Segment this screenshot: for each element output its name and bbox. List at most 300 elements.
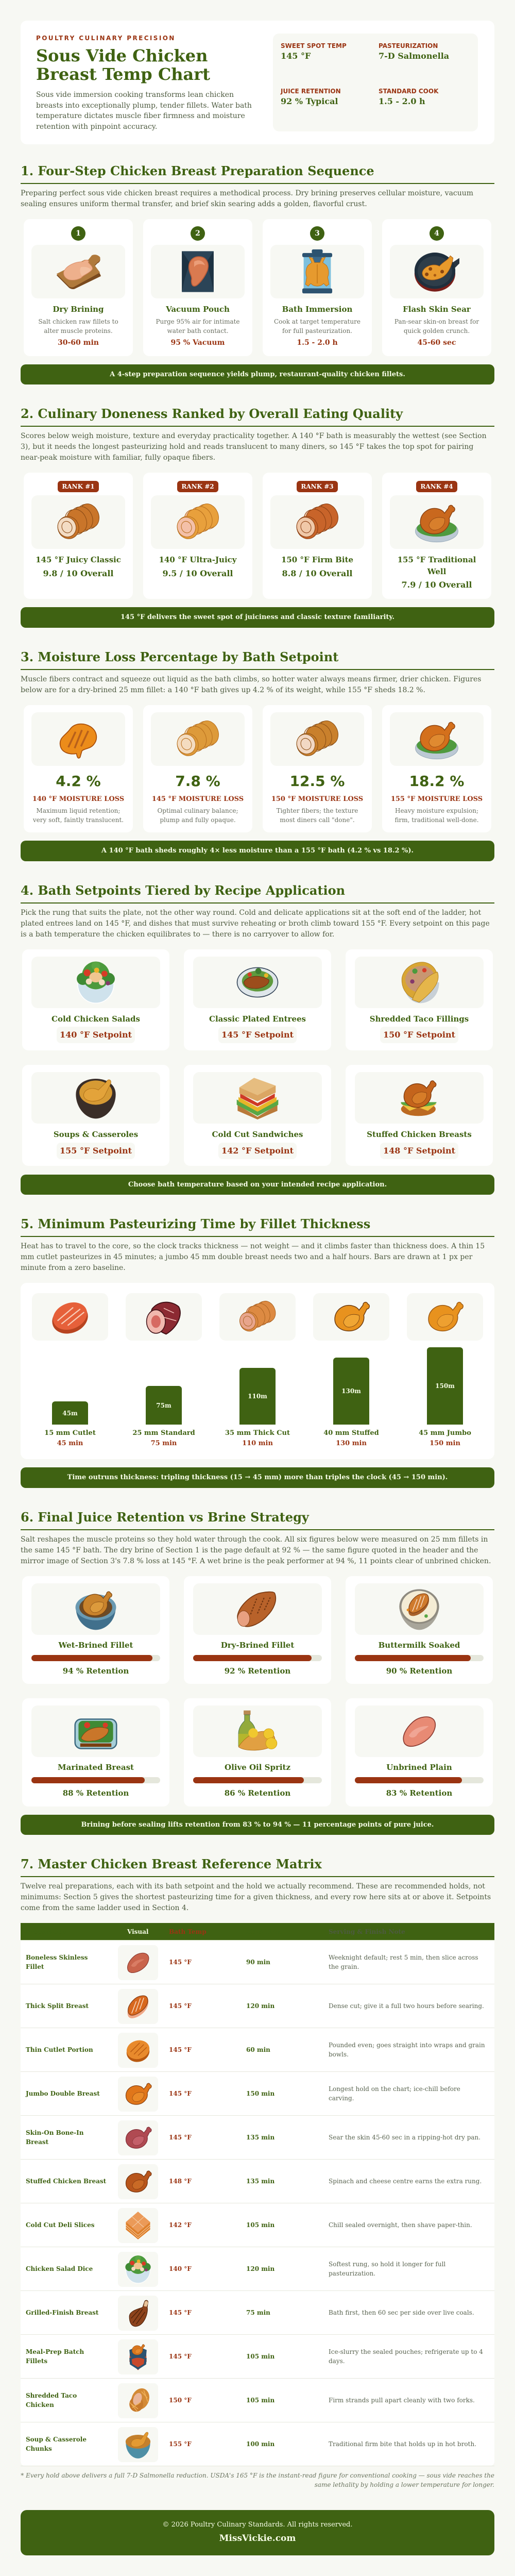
intro text: minimums: Section 5 gives the shortest pasteurizing time for a given thickness, and every row here sits at or above it. Setpoints bbox=[21, 1893, 491, 1901]
card: cold chicken salads bbox=[22, 949, 169, 1050]
row: jumbo double breast: 150 min bbox=[246, 2090, 274, 2097]
table header: Bath Temp bbox=[169, 1928, 207, 1935]
table footnote: * Every hold above delivers a full 7-D Salmonella reduction. USDA's 165 °F is the instant-read figure for conventional cooking — sous vide reaches the bbox=[21, 2472, 494, 2479]
intro text: Preparing perfect sous vide chicken breast requires a methodical process. Dry brining preserves cellular moisture, vacuum bbox=[21, 189, 473, 197]
icon: stacked slices bbox=[124, 2211, 152, 2240]
intro text: come from the same ladder used in Section 4. bbox=[21, 1904, 188, 1912]
key stats panel bbox=[273, 34, 478, 131]
setpoint bbox=[218, 1027, 297, 1043]
stat: sweet spot temp: 145 °F bbox=[281, 51, 311, 61]
score: 9.8 / 10 Overall bbox=[43, 568, 114, 578]
bar: 130 min bbox=[333, 1358, 369, 1425]
intro text: minute from a zero baseline. bbox=[21, 1264, 126, 1272]
card: vacuum pouch bbox=[143, 219, 252, 356]
intro text bbox=[21, 1534, 491, 1567]
column label: 40 mm bbox=[305, 1428, 398, 1449]
description: very soft, faintly translucent. bbox=[33, 816, 124, 824]
takeaway banner bbox=[21, 1175, 494, 1195]
stat: standard cook: STANDARD COOK bbox=[379, 88, 438, 95]
setpoint bbox=[380, 1143, 458, 1159]
icon: jumbo breast bbox=[425, 1297, 465, 1336]
icon: sliced breast bbox=[177, 721, 219, 756]
description bbox=[276, 807, 358, 824]
row: thick split breast: Dense cut; give it a full two hours before searing. bbox=[329, 2002, 484, 2010]
step description: water bath contact. bbox=[167, 327, 229, 334]
column label: 40 mm: 40 mm Stuffed bbox=[323, 1429, 379, 1437]
section 5: pasteurizing time bbox=[0, 1216, 515, 1488]
recipe name: Soups & Casseroles bbox=[54, 1130, 138, 1139]
column label: 15 mm bbox=[24, 1428, 116, 1449]
intro text: temperature dictates muscle fiber firmness and moisture bbox=[36, 112, 245, 120]
row: shredded taco chicken: 150 °F bbox=[169, 2397, 192, 2404]
intro text bbox=[21, 909, 490, 939]
card: 145 F bbox=[143, 705, 252, 832]
row: stuffed chicken breast: 148 °F bbox=[169, 2178, 192, 2185]
row: boneless skinless fillet bbox=[21, 1941, 494, 1984]
row: soup and casserole chunks: Chunks bbox=[26, 2445, 52, 2452]
row: cold cut deli slices: Chill sealed overnight, then shave paper-thin. bbox=[329, 2221, 472, 2229]
step badge 2 bbox=[191, 226, 205, 241]
card: marinated breast bbox=[22, 1698, 169, 1806]
column label: 15 mm: 45 min bbox=[57, 1440, 83, 1447]
row: thick split breast: 145 °F bbox=[169, 2002, 192, 2010]
step description: Salt chicken raw fillets to bbox=[38, 318, 118, 325]
loss percentage: 12.5 % bbox=[290, 773, 345, 790]
intro text: Salt reshapes the muscle proteins so they hold water through the cook. All six figures below were measured on 25 mm fillets in bbox=[21, 1535, 488, 1544]
row: meal-prep batch fillets: 105 min bbox=[246, 2353, 274, 2360]
retention bar bbox=[355, 1777, 484, 1783]
stat: pasteurization: PASTEURIZATION bbox=[379, 42, 438, 49]
takeaway banner bbox=[21, 1815, 494, 1835]
table footnote bbox=[21, 2471, 494, 2489]
bar chart panel bbox=[21, 1283, 494, 1459]
row: thin cutlet portion: Thin Cutlet Portion bbox=[26, 2046, 93, 2053]
table header: Preparation bbox=[26, 1928, 67, 1935]
row: soup and casserole chunks: 155 °F bbox=[169, 2440, 192, 2448]
icon: cutlet bbox=[124, 2036, 152, 2065]
takeaway banner: Time outruns thickness: tripling thickness (15 → 45 mm) more than triples the clock (45 → 150 min). bbox=[67, 1474, 448, 1481]
step description: alter muscle proteins. bbox=[44, 327, 113, 334]
setpoint: 148 °F Setpoint bbox=[383, 1146, 455, 1156]
score: 9.5 / 10 Overall bbox=[162, 568, 233, 578]
icon: vacuum pouch bbox=[182, 251, 214, 292]
description: most diners call "done". bbox=[280, 816, 355, 824]
row: meal-prep batch fillets bbox=[21, 2335, 494, 2379]
title bbox=[36, 46, 210, 84]
doneness name: 140 °F Ultra-Juicy bbox=[159, 555, 237, 564]
eyebrow: POULTRY CULINARY PRECISION bbox=[36, 35, 176, 42]
row: skin-on bone-in breast: 145 °F bbox=[169, 2134, 192, 2141]
takeaway banner bbox=[21, 1467, 494, 1488]
intro text bbox=[21, 675, 481, 694]
icon: raw fillet bbox=[124, 1948, 152, 1977]
card: rank 2 bbox=[143, 473, 252, 599]
takeaway banner: A 140 °F bath sheds roughly 4× less moisture than a 155 °F bath (4.2 % vs 18.2 %). bbox=[101, 847, 414, 855]
table header: Serving & Finish Note bbox=[329, 1928, 405, 1935]
doneness name: 145 °F Juicy Classic bbox=[36, 555, 121, 564]
bar: 130 min: 130m bbox=[341, 1387, 361, 1395]
icon: plated whole chicken bbox=[415, 722, 458, 760]
row: grilled-finish breast: Grilled-Finish Breast bbox=[26, 2309, 98, 2316]
intro text: Heat has to travel to the core, so the clock tracks thickness — not weight — and it climbs faster than thickness does. A thin 15 bbox=[21, 1242, 485, 1250]
row: meal-prep batch fillets: days. bbox=[329, 2357, 345, 2365]
row: stuffed chicken breast: 135 min bbox=[246, 2178, 274, 2185]
card: wet-brined fillet bbox=[22, 1576, 169, 1684]
step description: Purge 95% air for intimate bbox=[156, 318, 240, 325]
column label: 25 mm bbox=[117, 1428, 210, 1449]
icon: chicken on board bbox=[57, 255, 101, 289]
name: Marinated Breast bbox=[58, 1763, 134, 1772]
retention value: 92 % Retention bbox=[225, 1666, 290, 1676]
intro text: mm cutlet pasteurizes in 45 minutes; a jumbo 45 mm double breast needs two and a half hours. Bars are drawn at 1 px per bbox=[21, 1253, 472, 1261]
section 6: juice retention bbox=[0, 1510, 515, 1835]
row: skin-on bone-in breast: 135 min bbox=[246, 2134, 274, 2141]
takeaway banner: 145 °F delivers the sweet spot of juiciness and classic texture familiarity. bbox=[121, 613, 394, 621]
intro text: plated entrees land on 145 °F, and dishes that must survive reheating or broth climb toward 155 °F. Every setpoint on this page bbox=[21, 919, 490, 928]
title: Breast Temp Chart bbox=[36, 64, 210, 84]
heading: 1. Four-Step Chicken Breast Preparation Sequence bbox=[21, 163, 374, 178]
description bbox=[394, 807, 479, 824]
row: thin cutlet portion: Pounded even; goes straight into wraps and grain bbox=[329, 2042, 485, 2049]
icon: marinade dish bbox=[74, 1710, 117, 1753]
step description: for full pasteurization. bbox=[282, 327, 352, 334]
step description bbox=[156, 318, 240, 334]
row: thick split breast: 120 min bbox=[246, 2002, 274, 2010]
step description bbox=[274, 318, 360, 334]
bar: 150 min bbox=[427, 1347, 463, 1425]
intro text: retention with pinpoint accuracy. bbox=[36, 123, 157, 131]
column label: 15 mm: 15 mm Cutlet bbox=[44, 1429, 96, 1437]
row: stuffed chicken breast: Spinach and cheese centre earns the extra rung. bbox=[329, 2178, 482, 2185]
rank badge: RANK #3 bbox=[301, 483, 334, 490]
icon: peppered fillet bbox=[236, 1587, 279, 1631]
takeaway banner bbox=[21, 841, 494, 861]
setpoint: 145 °F Setpoint bbox=[221, 1030, 294, 1040]
rank badge: RANK #1 bbox=[62, 483, 95, 490]
row: boneless skinless fillet: Boneless Skinless bbox=[26, 1954, 88, 1961]
takeaway banner bbox=[21, 364, 494, 384]
section 4: setpoints by recipe bbox=[21, 883, 494, 1195]
card: stuffed chicken breasts bbox=[346, 1065, 493, 1166]
row: boneless skinless fillet: 145 °F bbox=[169, 1959, 192, 1966]
step badge 4: 4 bbox=[434, 229, 439, 238]
column label: 25 mm: 75 min bbox=[151, 1440, 177, 1447]
row: skin-on bone-in breast: Skin-On Bone-In bbox=[26, 2129, 83, 2136]
description: plump and fully opaque. bbox=[160, 816, 236, 824]
doneness name: Well bbox=[427, 567, 446, 576]
stat: juice retention: 92 % Typical bbox=[281, 96, 338, 106]
description: firm, traditional well-done. bbox=[394, 816, 479, 824]
icon: standard fillet bbox=[144, 1297, 183, 1336]
icon: stuffed chicken bbox=[398, 1076, 441, 1119]
row: skin-on bone-in breast bbox=[21, 2116, 494, 2160]
card: rank 4 bbox=[382, 473, 491, 599]
name: Dry-Brined Fillet bbox=[221, 1641, 294, 1650]
bar: 150 min: 150m bbox=[435, 1382, 455, 1390]
row: soup and casserole chunks: Soup & Casserole bbox=[26, 2436, 87, 2443]
icon: water bath jar bbox=[302, 249, 333, 294]
icon: taco bbox=[402, 962, 439, 1003]
intro text bbox=[36, 91, 252, 131]
setpoint: 155 °F Setpoint bbox=[60, 1146, 132, 1156]
label: 145 °F MOISTURE LOSS bbox=[152, 795, 244, 803]
row: chicken salad dice: pasteurization. bbox=[329, 2270, 375, 2277]
doneness name: 155 °F Traditional bbox=[398, 555, 476, 564]
doneness name: 150 °F Firm Bite bbox=[281, 555, 353, 564]
icon: raw breast bbox=[398, 1710, 441, 1753]
row: chicken salad dice: 120 min bbox=[246, 2265, 274, 2272]
card: bath immersion bbox=[263, 219, 372, 356]
recipe name: Classic Plated Entrees bbox=[209, 1014, 306, 1024]
step description: quick golden crunch. bbox=[404, 327, 470, 334]
step value: 1.5 - 2.0 h bbox=[297, 339, 338, 347]
description: Maximum liquid retention; bbox=[37, 807, 120, 814]
setpoint: 140 °F Setpoint bbox=[60, 1030, 132, 1040]
setpoint bbox=[57, 1027, 135, 1043]
rank badge bbox=[58, 481, 99, 492]
card: dry-brined fillet bbox=[184, 1576, 331, 1684]
score: 8.8 / 10 Overall bbox=[282, 568, 353, 578]
description: Optimal culinary balance; bbox=[157, 807, 238, 814]
rank badge bbox=[177, 481, 218, 492]
row: boneless skinless fillet: Weeknight default; rest 5 min, then slice across bbox=[329, 1954, 478, 1961]
label: 155 °F MOISTURE LOSS bbox=[391, 795, 483, 803]
heading: 3. Moisture Loss Percentage by Bath Setpoint bbox=[21, 649, 338, 664]
recipe name: Shredded Taco Fillings bbox=[370, 1014, 469, 1024]
setpoint bbox=[218, 1143, 297, 1159]
intro text: breasts into exceptionally plump, tender fillets. Water bath bbox=[36, 102, 252, 110]
bar: 75 min: 75m bbox=[156, 1402, 171, 1409]
icon: buttermilk bowl bbox=[398, 1587, 441, 1631]
table footnote: same lethality by holding a lower temperature for longer. bbox=[315, 2481, 494, 2488]
table header: Hold Time bbox=[246, 1928, 282, 1935]
loss percentage: 18.2 % bbox=[409, 773, 464, 790]
stat: pasteurization: 7-D Salmonella bbox=[379, 51, 449, 61]
card: dry brining bbox=[24, 219, 133, 356]
row: thin cutlet portion: 60 min bbox=[246, 2046, 270, 2053]
row: cold cut deli slices bbox=[21, 2203, 494, 2247]
step description bbox=[38, 318, 118, 334]
intro text bbox=[21, 1881, 491, 1914]
icon: thick cut bbox=[238, 1297, 277, 1336]
name: Buttermilk Soaked bbox=[379, 1641, 460, 1650]
row: jumbo double breast: Longest hold on the chart; ice-chill before bbox=[329, 2085, 460, 2093]
icon: raw bone-in chicken bbox=[124, 2123, 152, 2152]
heading: 2. Culinary Doneness Ranked by Overall Eating Quality bbox=[21, 406, 403, 421]
row: jumbo double breast: carving. bbox=[329, 2095, 354, 2102]
name: Unbrined Plain bbox=[386, 1763, 452, 1772]
row: boneless skinless fillet: the grain. bbox=[329, 1963, 359, 1970]
column label: 35 mm: 35 mm Thick Cut bbox=[225, 1429, 290, 1437]
title: Sous Vide Chicken bbox=[36, 46, 208, 65]
row: shredded taco chicken: 105 min bbox=[246, 2397, 274, 2404]
row: soup and casserole chunks: Traditional firm bite that holds up in hot broth. bbox=[329, 2440, 476, 2448]
stat: juice retention: JUICE RETENTION bbox=[281, 88, 341, 95]
setpoint bbox=[57, 1143, 135, 1159]
icon: salad bowl bbox=[77, 962, 115, 1003]
icon: salad bowl bbox=[124, 2255, 152, 2284]
row: skin-on bone-in breast: Sear the skin 45-60 sec in a ripping-hot dry pan. bbox=[329, 2134, 480, 2141]
takeaway banner: Brining before sealing lifts retention from 83 % to 94 % — 11 percentage points of pure juice. bbox=[81, 1821, 434, 1829]
takeaway banner: A 4-step preparation sequence yields plump, restaurant-quality chicken fillets. bbox=[110, 371, 405, 378]
heading: 4. Bath Setpoints Tiered by Recipe Application bbox=[21, 883, 345, 898]
row: meal-prep batch fillets: Fillets bbox=[26, 2357, 47, 2365]
icon: jumbo chicken bbox=[124, 2080, 152, 2109]
bar: 110 min: 110m bbox=[248, 1393, 267, 1400]
row: grilled-finish breast: 75 min bbox=[246, 2309, 270, 2316]
row: shredded taco chicken bbox=[21, 2379, 494, 2422]
column label: 45 mm: 150 min bbox=[430, 1440, 460, 1447]
bar: 110 min bbox=[239, 1368, 276, 1425]
recipe name: Stuffed Chicken Breasts bbox=[367, 1130, 472, 1139]
intro text: Muscle fibers contract and squeeze out liquid as the bath climbs, so hotter water always means firmer, drier chicken. Figures bbox=[21, 675, 481, 683]
intro text: below are for a dry-brined 25 mm fillet: a 140 °F bath gives up 4.2 % of its weight, while 155 °F sheds 18.2 %. bbox=[21, 686, 425, 694]
loss percentage: 7.8 % bbox=[175, 773, 220, 790]
step description bbox=[394, 318, 479, 334]
intro text: near-peak moisture with familiar, fully opaque fibers. bbox=[21, 454, 215, 462]
retention bar bbox=[193, 1655, 322, 1661]
intro text: sealing ensures uniform thermal transfer, and brief skin searing adds a golden, flavorful crust. bbox=[21, 200, 367, 208]
step value: 30-60 min bbox=[58, 339, 99, 347]
takeaway banner: Choose bath temperature based on your intended recipe application. bbox=[128, 1181, 387, 1189]
retention bar bbox=[31, 1777, 160, 1783]
icon: plated entree bbox=[237, 967, 278, 998]
description: Tighter fibers; the texture bbox=[277, 807, 358, 814]
card: 140 F bbox=[24, 705, 133, 832]
card: rank 3 bbox=[263, 473, 372, 599]
row: thin cutlet portion: 145 °F bbox=[169, 2046, 192, 2053]
label: 140 °F MOISTURE LOSS bbox=[32, 795, 124, 803]
icon: stacked containers bbox=[124, 2343, 152, 2371]
table header bbox=[21, 1923, 494, 1941]
column label: 45 mm bbox=[399, 1428, 491, 1449]
section 2: doneness ranking bbox=[21, 406, 494, 628]
retention bar bbox=[355, 1655, 484, 1661]
icon: thin cutlet bbox=[50, 1297, 90, 1336]
bar: 75 min bbox=[146, 1386, 182, 1425]
icon: sandwich bbox=[237, 1078, 278, 1119]
score: 7.9 / 10 Overall bbox=[401, 580, 472, 590]
retention value: 90 % Retention bbox=[386, 1666, 452, 1676]
step description: Cook at target temperature bbox=[274, 318, 360, 325]
intro text: Scores below weigh moisture, texture and everyday practicality together. A 140 °F bath is measurably the wettest (see Section bbox=[21, 432, 487, 440]
intro text: 3), but it needs the longest pasteurizing hold and reads translucent to many diners, so 145 °F takes the top spot for pairing bbox=[21, 443, 473, 451]
row: thin cutlet portion bbox=[21, 2028, 494, 2072]
intro text: Pick the rung that suits the plate, not the other way round. Cold and delicate applications sit at the soft end of the ladder, hot bbox=[21, 909, 481, 917]
name: Olive Oil Spritz bbox=[225, 1763, 290, 1772]
card: flash skin sear bbox=[382, 219, 491, 356]
column label: 35 mm bbox=[211, 1428, 304, 1449]
name: Wet-Brined Fillet bbox=[59, 1641, 133, 1650]
row: boneless skinless fillet: 90 min bbox=[246, 1959, 270, 1966]
intro text: Twelve real preparations, each with its bath setpoint and the hold we actually recommend. These are recommended holds, not bbox=[21, 1882, 485, 1891]
step value: 95 % Vacuum bbox=[171, 339, 225, 347]
row: meal-prep batch fillets: Meal-Prep Batch bbox=[26, 2348, 84, 2355]
card: olive oil spritz bbox=[184, 1698, 331, 1806]
takeaway banner bbox=[21, 607, 494, 628]
row: shredded taco chicken: Chicken bbox=[26, 2401, 54, 2408]
step badge 3 bbox=[310, 226, 324, 241]
retention bar bbox=[31, 1655, 160, 1661]
icon: sliced roast bbox=[297, 504, 338, 539]
retention value: 94 % Retention bbox=[63, 1666, 129, 1676]
setpoint: 150 °F Setpoint bbox=[383, 1030, 455, 1040]
header panel bbox=[21, 21, 494, 144]
intro text bbox=[21, 1241, 485, 1274]
card: rank 1 bbox=[24, 473, 133, 599]
step description: Pan-sear skin-on breast for bbox=[394, 318, 479, 325]
intro text bbox=[21, 189, 473, 208]
retention bar bbox=[193, 1777, 322, 1783]
step badge 4 bbox=[430, 226, 444, 241]
row: grilled-finish breast bbox=[21, 2291, 494, 2335]
column label: 35 mm: 110 min bbox=[242, 1440, 273, 1447]
icon: olive oil and lemon bbox=[236, 1710, 279, 1753]
step value: 45-60 sec bbox=[418, 339, 456, 347]
heading: 6. Final Juice Retention vs Brine Strategy bbox=[21, 1510, 309, 1525]
row: thick split breast bbox=[21, 1984, 494, 2028]
row: jumbo double breast: 145 °F bbox=[169, 2090, 192, 2097]
section 3: moisture loss bbox=[21, 649, 494, 861]
icon: soup bowl bbox=[124, 2430, 152, 2459]
row: skin-on bone-in breast: Breast bbox=[26, 2138, 48, 2146]
retention value: 83 % Retention bbox=[386, 1788, 452, 1798]
intro text: mirror image of Section 3's 7.8 % loss at 145 °F. A wet brine is the peak performer at 94 %, 11 points clear of unbrined chicken. bbox=[21, 1557, 491, 1565]
row: cold cut deli slices: 105 min bbox=[246, 2221, 274, 2229]
icon: sliced roast bbox=[58, 504, 99, 539]
column label: 45 mm: 45 mm Jumbo bbox=[419, 1429, 471, 1437]
card: 150 F bbox=[263, 705, 372, 832]
doneness name bbox=[398, 555, 476, 576]
row: thick split breast: Thick Split Breast bbox=[26, 2002, 89, 2010]
icon: soup bowl bbox=[76, 1079, 116, 1118]
step badge 2: 2 bbox=[195, 229, 200, 238]
footer bbox=[21, 2510, 494, 2555]
row: chicken salad dice bbox=[21, 2247, 494, 2291]
stat: standard cook: 1.5 - 2.0 h bbox=[379, 96, 425, 106]
stat: pasteurization bbox=[379, 42, 449, 61]
section 7: reference matrix bbox=[0, 1856, 515, 2496]
row: shredded taco chicken: Shredded Taco bbox=[26, 2392, 77, 2399]
recipe name: Cold Cut Sandwiches bbox=[212, 1130, 303, 1139]
stat: sweet spot temp: SWEET SPOT TEMP bbox=[281, 42, 347, 49]
row: meal-prep batch fillets: 145 °F bbox=[169, 2353, 192, 2360]
bar: 45 min: 45m bbox=[62, 1409, 78, 1416]
step name: Bath Immersion bbox=[282, 305, 352, 314]
intro text: is a bath temperature the chicken equilibrates to — there is no carryover to allow for. bbox=[21, 930, 334, 939]
step name: Flash Skin Sear bbox=[403, 305, 471, 314]
recipe name: Cold Chicken Salads bbox=[52, 1014, 140, 1024]
site name: MissVickie.com bbox=[219, 2533, 296, 2544]
column label: 25 mm: 25 mm Standard bbox=[132, 1429, 195, 1437]
step name: Dry Brining bbox=[53, 305, 104, 314]
rank badge bbox=[297, 481, 338, 492]
row: stuffed chicken breast: Stuffed Chicken Breast bbox=[26, 2178, 106, 2185]
step badge 3: 3 bbox=[315, 229, 320, 238]
row: soup and casserole chunks: 100 min bbox=[246, 2440, 274, 2448]
icon: sliced roast bbox=[177, 504, 219, 539]
icon: stuffed breast bbox=[332, 1297, 371, 1336]
card: unbrined plain bbox=[346, 1698, 493, 1806]
card: 155 F bbox=[382, 705, 491, 832]
copyright: © 2026 Poultry Culinary Standards. All rights reserved. bbox=[163, 2521, 352, 2529]
rank badge bbox=[416, 481, 457, 492]
description bbox=[33, 807, 124, 824]
bar: 45 min bbox=[52, 1401, 88, 1425]
row: stuffed chicken breast bbox=[21, 2160, 494, 2203]
label: 150 °F MOISTURE LOSS bbox=[271, 795, 363, 803]
row: chicken salad dice: Chicken Salad Dice bbox=[26, 2265, 93, 2272]
